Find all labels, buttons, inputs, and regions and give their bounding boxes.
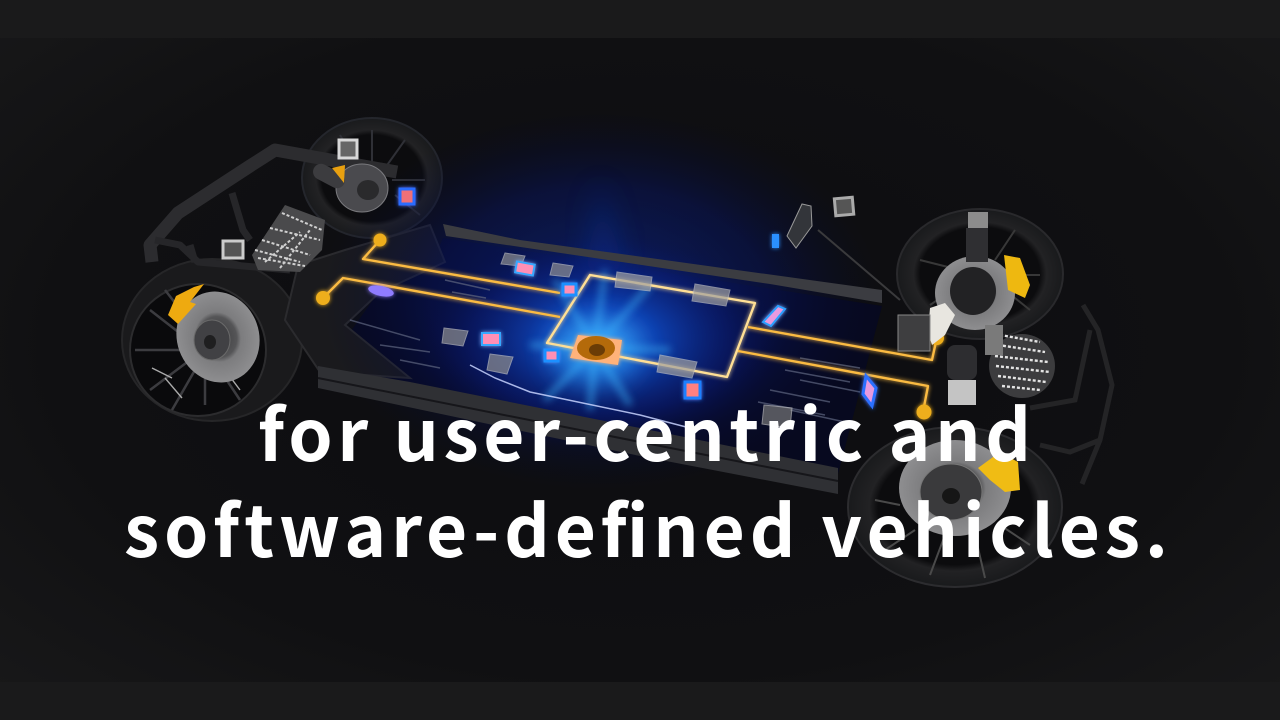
illustration: vehicle skateboard chassis [122,110,1112,587]
wide dim blue glow [320,110,880,490]
brake assembly: front right top [935,212,1030,330]
central processor chip [570,335,622,365]
electric drive unit: right [985,325,1055,398]
blue sensor tiles [367,189,876,406]
chassis floor [322,238,882,474]
front bumper frame [150,150,397,262]
gold circuit lines [323,240,937,412]
brake caliper [168,284,204,324]
bumper lower struts [155,193,290,270]
wheel: rear left top [302,118,442,238]
hub assembly: rear left top [310,161,388,212]
wheel: front right top [897,209,1063,339]
windshield camera sensor [787,204,900,300]
lower rail [318,366,838,494]
caption: for user-centric and [258,380,1031,482]
side member left [285,225,445,378]
blue glow [415,230,785,450]
caption: software-defined vehicles. [124,476,1168,578]
white sensor tiles [223,140,854,258]
rear bumper frame [1030,305,1112,484]
upper rail [443,224,882,303]
caption [124,380,1168,578]
brake disc: rear left bottom [164,280,272,394]
motor: front left [252,205,325,272]
core glow [553,322,637,382]
wheel: rear left bottom [122,259,302,421]
floor white edge [470,365,690,428]
grey modules [442,253,792,428]
brake caliper [978,452,1020,492]
gold nodes [316,234,944,420]
wheel: front right bottom [848,427,1062,587]
brake disc: front right bottom [899,440,1020,536]
floor details [350,280,860,422]
light rays [530,270,670,410]
steering and strut: right [898,303,977,405]
upward ray [585,180,625,270]
